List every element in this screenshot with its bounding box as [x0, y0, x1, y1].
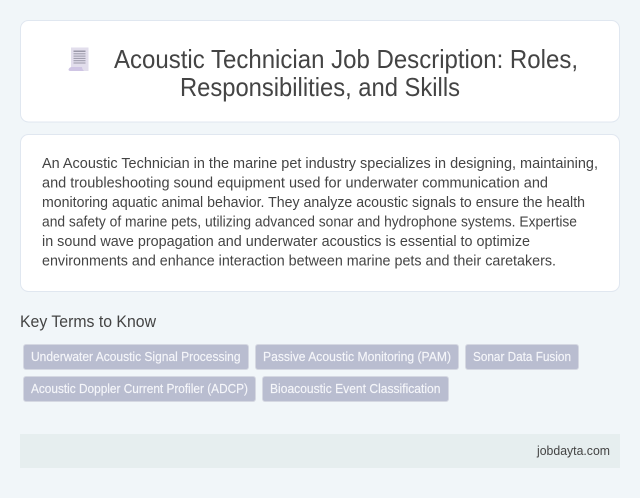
panel: key term chips — [24, 344, 578, 402]
description text: environments and enhance interaction between marine pets and their caretakers. — [42, 254, 556, 270]
description text: in sound wave propagation and underwater acoustics is essential to optimize — [42, 234, 530, 250]
description text: and safety of marine pets, utilizing advanced sonar and hydrophone systems. Expertise — [42, 214, 577, 230]
panel: description card — [20, 134, 620, 292]
chip: ADCP: Acoustic Doppler Current Profiler (ADCP) — [31, 382, 248, 396]
title: Acoustic Technician Job Description: Roles, — [114, 44, 578, 74]
panel: footer — [20, 434, 620, 468]
icon: document scroll — [68, 48, 88, 71]
description text: and troubleshooting sound equipment used for underwater communication and — [42, 176, 548, 192]
description text: monitoring aquatic animal behavior. They analyze acoustic signals to ensure the health — [42, 195, 585, 211]
chip: bioacoustic event classification: Bioacoustic Event Classification — [270, 382, 441, 396]
chip: passive acoustic monitoring — [256, 344, 458, 370]
chip: underwater acoustic signal processing: Underwater Acoustic Signal Processing — [31, 350, 241, 364]
chip: passive acoustic monitoring: Passive Acoustic Monitoring (PAM) — [263, 350, 451, 364]
footer source text: jobdayta.com — [536, 444, 610, 458]
chip: underwater acoustic signal processing — [24, 344, 248, 370]
chip: sonar data fusion: Sonar Data Fusion — [473, 350, 571, 364]
chip: bioacoustic event classification — [262, 376, 448, 402]
chip: ADCP — [24, 376, 256, 402]
panel: title card — [20, 20, 620, 122]
title — [114, 44, 578, 102]
description text — [42, 156, 598, 270]
heading: key terms: Key Terms to Know — [20, 313, 156, 331]
title: Responsibilities, and Skills — [180, 72, 460, 102]
chip: sonar data fusion — [466, 344, 578, 370]
description text: An Acoustic Technician in the marine pet industry specializes in designing, maintaining, — [42, 156, 598, 172]
